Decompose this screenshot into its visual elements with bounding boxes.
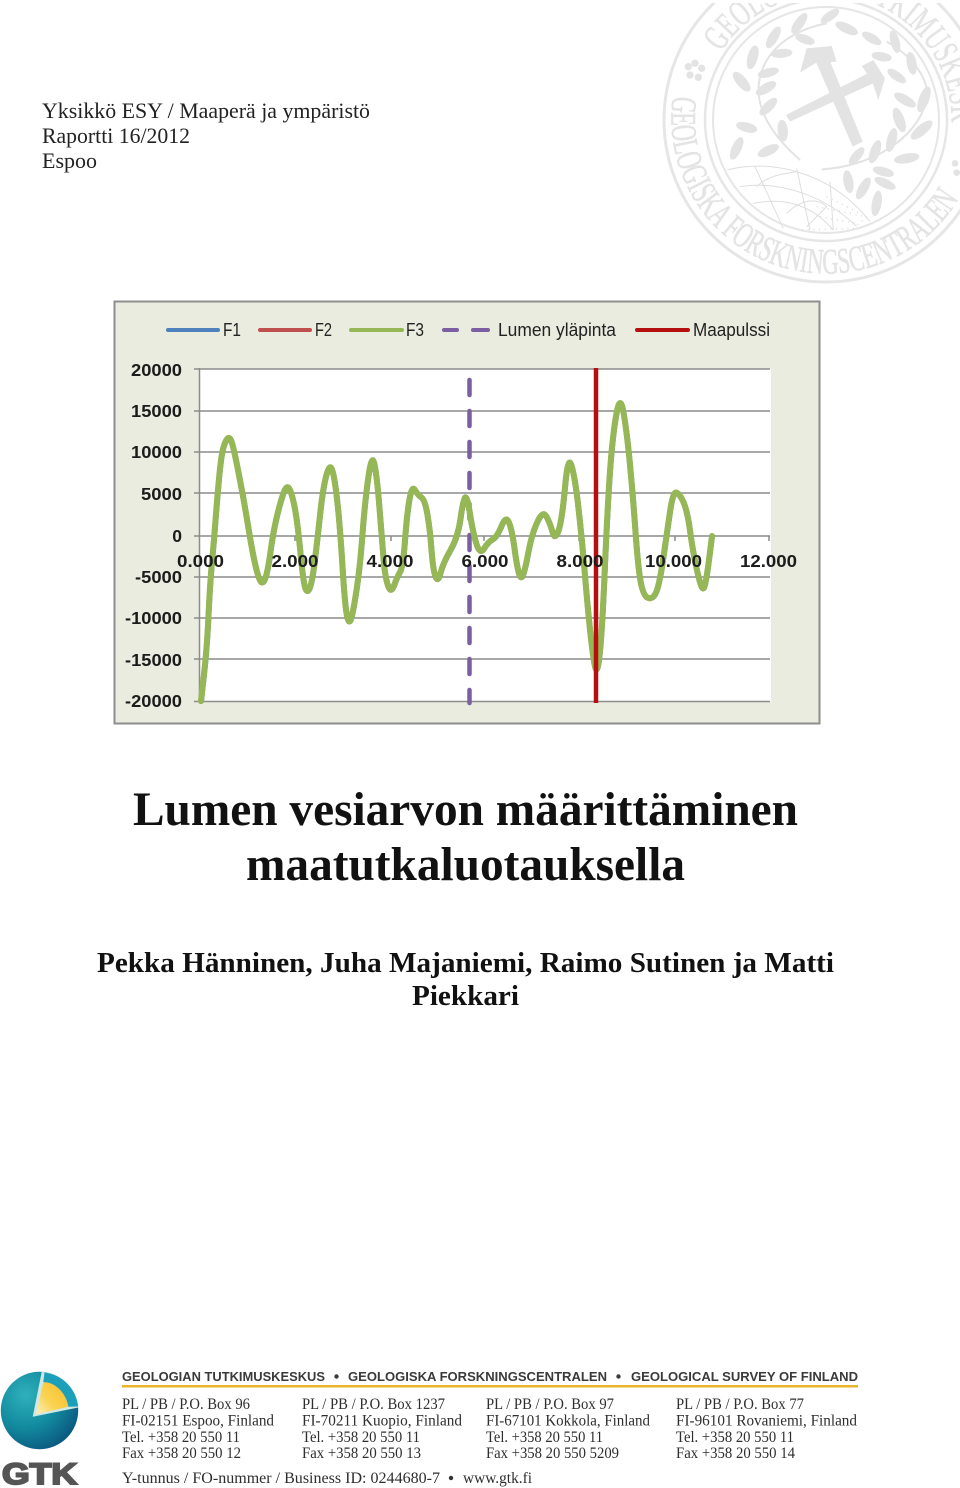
x axis labels: 12.000 (740, 551, 797, 571)
authors: Pekka Hänninen, Juha Majaniemi, Raimo Sutinen ja Matti (97, 947, 834, 979)
seal watermark (662, 3, 960, 284)
footer address: Espoo: PL / PB / P.O. Box 96 (122, 1396, 250, 1413)
header text block (42, 98, 370, 173)
footer business id: www.gtk.fi (463, 1470, 533, 1487)
footer address: Kokkola: FI-67101 Kokkola, Finland (486, 1412, 650, 1430)
legend: Maapulssi (693, 320, 770, 340)
footer address: Kokkola: Tel. +358 20 550 11 (486, 1429, 603, 1446)
legend: F3 (406, 320, 424, 340)
seal artwork (685, 7, 960, 230)
footer address: Rovaniemi (676, 1396, 857, 1462)
lumen yläpinta dashed line (467, 380, 472, 703)
footer address: Kuopio: Fax +358 20 550 13 (302, 1445, 421, 1462)
legend: F1 (223, 320, 241, 340)
icon: globe (1, 1372, 78, 1449)
seal rings (664, 0, 960, 282)
x axis labels: 4.000 (366, 551, 414, 571)
header text block: Raportti 16/2012 (42, 123, 190, 148)
footer address: Espoo (122, 1396, 274, 1462)
legend (168, 320, 770, 340)
title (133, 783, 798, 891)
x axis labels: 0.000 (177, 551, 224, 571)
footer address: Espoo: Fax +358 20 550 12 (122, 1445, 241, 1462)
footer address: Kuopio: PL / PB / P.O. Box 1237 (302, 1396, 445, 1413)
crossed hammers (786, 46, 885, 147)
y axis labels: 0 (172, 526, 182, 546)
x axis labels: 10.000 (645, 551, 702, 571)
y axis labels: 10000 (131, 442, 182, 462)
x axis labels (177, 551, 797, 571)
footer address: Espoo: FI-02151 Espoo, Finland (122, 1412, 274, 1430)
footer address: Rovaniemi: PL / PB / P.O. Box 77 (676, 1396, 804, 1413)
legend: F2 (315, 320, 332, 340)
y axis labels: 5000 (141, 484, 182, 504)
x axis labels: 2.000 (272, 551, 319, 571)
footer organisation names (122, 1369, 858, 1388)
footer address: Rovaniemi: Tel. +358 20 550 11 (676, 1429, 794, 1446)
footer address: Rovaniemi: FI-96101 Rovaniemi, Finland (676, 1412, 857, 1430)
title: Lumen vesiarvon määrittäminen (133, 783, 798, 836)
header text block: Yksikkö ESY / Maaperä ja ympäristö (42, 98, 370, 123)
wreath leaves (728, 7, 934, 216)
title: maatutkaluotauksella (246, 838, 685, 891)
x axis labels: 8.000 (556, 551, 604, 571)
GTK logo (1, 1372, 78, 1488)
y axis labels: 15000 (131, 401, 182, 421)
plot area (199, 369, 771, 702)
legend: Lumen yläpinta (498, 320, 617, 340)
y axis labels: -20000 (125, 691, 182, 711)
footer address: Kokkola (486, 1396, 650, 1462)
footer address: Kuopio: Tel. +358 20 550 11 (302, 1429, 420, 1446)
chart background (114, 302, 820, 724)
footer address: Kuopio (302, 1396, 462, 1462)
authors (97, 947, 834, 1012)
footer address: Rovaniemi: Fax +358 20 550 14 (676, 1445, 795, 1462)
y axis labels (125, 360, 182, 711)
y axis labels: -15000 (125, 650, 182, 670)
maapulssi vertical line (594, 368, 598, 703)
globe (727, 166, 870, 230)
footer organisation names: GEOLOGIAN TUTKIMUSKESKUS (122, 1369, 325, 1384)
footer address: Kokkola: PL / PB / P.O. Box 97 (486, 1396, 614, 1413)
footer address: Kokkola: Fax +358 20 550 5209 (486, 1445, 619, 1462)
footer address: Kuopio: FI-70211 Kuopio, Finland (302, 1412, 462, 1430)
footer address: Espoo: Tel. +358 20 550 11 (122, 1429, 240, 1446)
wreath branches (759, 23, 927, 169)
y axis labels: 20000 (131, 360, 182, 380)
footer business id: Y-tunnus / FO-nummer / Business ID: 0244680-7 (122, 1470, 440, 1487)
y axis labels: -10000 (125, 608, 182, 628)
authors: Piekkari (412, 980, 519, 1012)
footer organisation names: GEOLOGICAL SURVEY OF FINLAND (631, 1369, 858, 1384)
y axis labels: -5000 (135, 567, 182, 587)
rosettes (685, 60, 960, 176)
x axis labels: 6.000 (462, 551, 509, 571)
signal traces F1 F2 F3 (201, 403, 712, 702)
header text block: Espoo (42, 148, 97, 173)
footer organisation names: GEOLOGISKA FORSKNINGSCENTRALEN (348, 1369, 607, 1384)
panel: chart (114, 302, 820, 724)
